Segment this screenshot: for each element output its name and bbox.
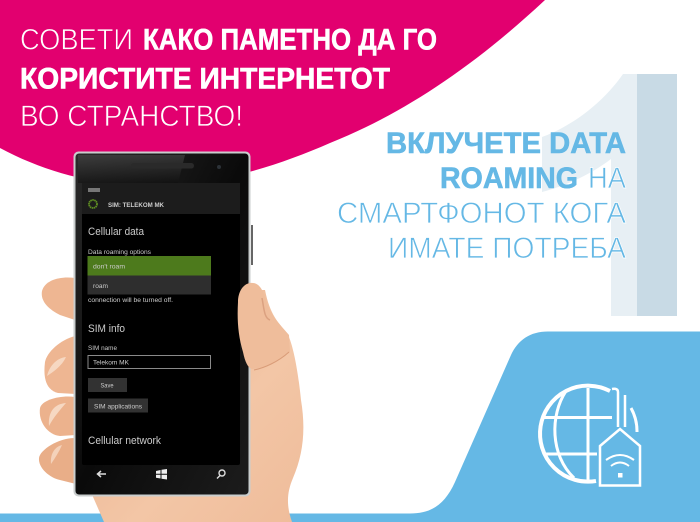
- tip text: [337, 127, 626, 265]
- finger nail 3: [49, 403, 66, 426]
- settings content: SIM info: [88, 323, 125, 335]
- settings content: Cellular network: [88, 435, 161, 447]
- nav: back: [98, 471, 106, 477]
- settings content: Telekom MK: [93, 360, 130, 366]
- palm: [90, 290, 303, 522]
- settings content: Data roaming options: [88, 249, 152, 256]
- finger 3: [40, 397, 76, 436]
- settings content: SIM applications: [94, 404, 143, 410]
- glare: [78, 155, 185, 183]
- finger 2: [44, 336, 76, 394]
- tip text: ИМАТЕ ПОТРЕБА: [388, 232, 626, 265]
- speaker: [131, 163, 194, 168]
- blue corner panel: [0, 332, 700, 522]
- tip text: СМАРТФОНОТ КОГА: [337, 197, 626, 230]
- tip text: ROAMING: [440, 162, 578, 195]
- nav: windows: [156, 469, 167, 480]
- title: КОРИСТИТЕ ИНТЕРНЕТОТ: [20, 62, 390, 96]
- settings content: don't roam: [93, 264, 125, 270]
- icon: globe with wifi tag: [540, 386, 640, 486]
- screen: [82, 183, 240, 465]
- finger 1: [42, 278, 75, 320]
- settings content: Cellular data: [88, 226, 145, 238]
- tip text: НА: [588, 162, 626, 195]
- settings content: roam: [93, 283, 108, 290]
- title: ВО СТРАНСТВО!: [20, 100, 243, 133]
- settings content: Save: [100, 382, 114, 390]
- settings header: SIM: TELEKOM MK: [108, 202, 164, 209]
- camera: [217, 165, 221, 169]
- finger nail 4: [51, 445, 62, 464]
- title: СОВЕТИ: [20, 24, 133, 56]
- thumb: [238, 283, 290, 370]
- settings content: SIM name: [88, 345, 117, 352]
- hand: [39, 278, 303, 522]
- tip text: ВКЛУЧЕТЕ DATA: [386, 127, 626, 160]
- phone: [74, 152, 253, 496]
- finger nail 2: [47, 357, 66, 376]
- big numeral 1: [542, 74, 677, 316]
- nav: search: [217, 470, 225, 478]
- settings header: [82, 183, 240, 214]
- settings content: connection will be turned off.: [88, 297, 173, 304]
- finger 4: [39, 438, 76, 484]
- magenta header shape: [0, 0, 545, 186]
- title: КАКО ПАМЕТНО ДА ГО: [143, 24, 437, 56]
- title: [20, 24, 437, 133]
- settings content: [88, 226, 211, 447]
